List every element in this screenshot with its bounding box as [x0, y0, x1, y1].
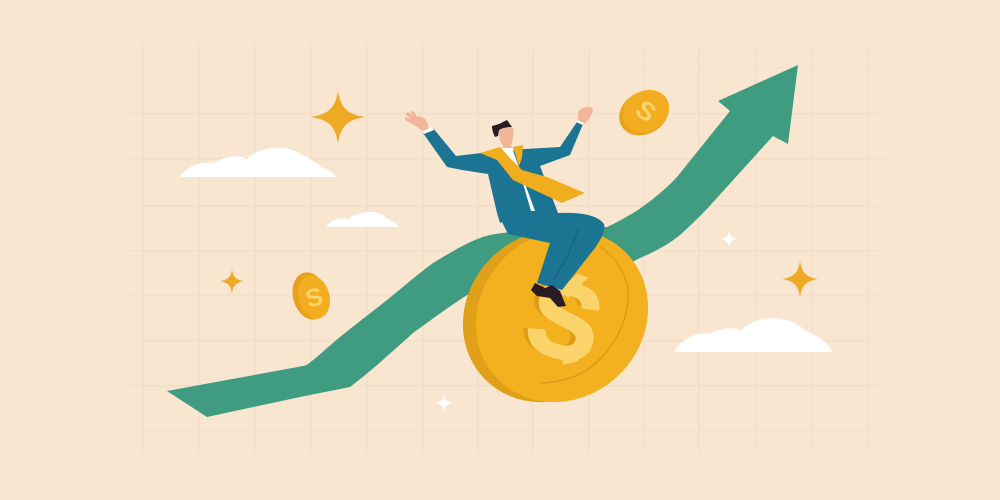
star: white bottom: [435, 394, 453, 412]
coin inner rim: [540, 247, 628, 383]
neck and face: [499, 127, 513, 152]
coin: large dollar coin: [427, 194, 684, 438]
dollar sign: S: [516, 255, 613, 387]
shirt: [502, 148, 535, 211]
jacket: [423, 122, 583, 223]
scarf collar: [513, 145, 523, 166]
right cuff: [576, 120, 584, 125]
leg and trousers: [497, 212, 604, 290]
left cuff: [423, 127, 434, 134]
star: white right: [721, 231, 737, 248]
coin: small left: [287, 268, 335, 324]
person: businessman riding the coin: [405, 107, 604, 307]
dollar sign bottom stub: [561, 350, 581, 365]
coin edge: [427, 194, 671, 438]
cloud: small centre: [326, 212, 399, 227]
dollar sign shadow: S: [510, 253, 607, 385]
coin face: [440, 194, 684, 438]
left hand: [405, 111, 428, 131]
star: gold right: [782, 261, 818, 297]
shoes: [531, 283, 566, 307]
coin: small left: S: [303, 282, 326, 314]
trouser crease: [553, 228, 578, 280]
tie and scarf: [480, 147, 585, 203]
cloud: lower right: [674, 318, 832, 352]
arrow: rising green trend: [167, 65, 798, 417]
star: small gold left: [220, 269, 244, 294]
coin: small top right: [611, 82, 677, 144]
hair: [492, 120, 512, 137]
cloud: upper left: [180, 148, 336, 177]
coin: small top right: S: [630, 94, 662, 128]
star: large gold: [311, 91, 365, 143]
right hand: [578, 107, 593, 124]
dollar sign top stub: [560, 273, 588, 298]
